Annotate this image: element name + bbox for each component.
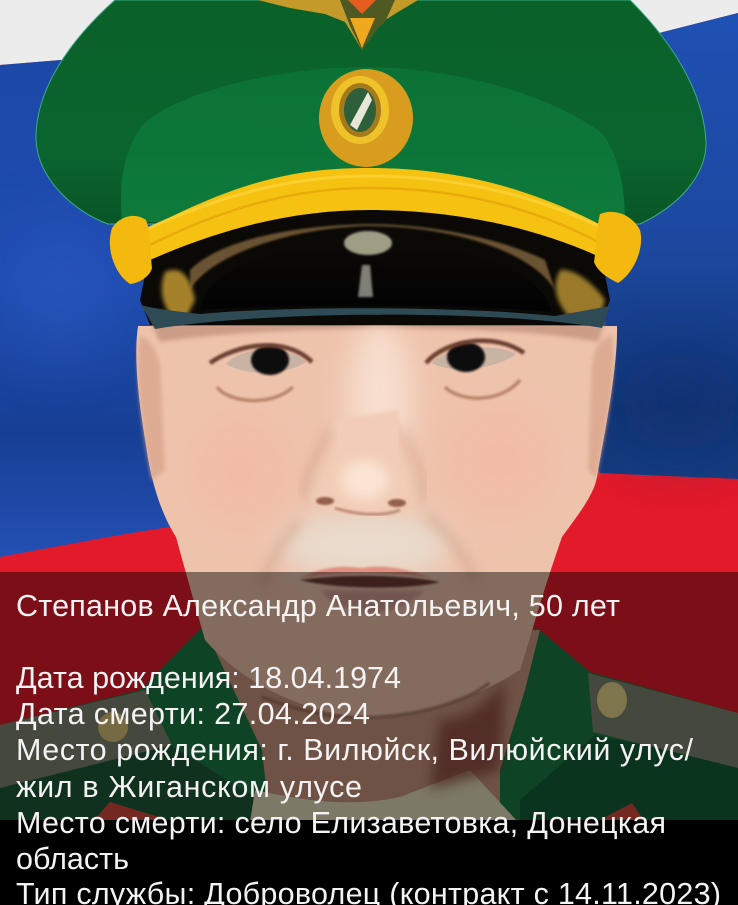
visor bottom edge	[141, 305, 610, 329]
gold cord	[110, 168, 641, 284]
uniform: shoulders and jacket	[0, 627, 738, 830]
visor centre highlight	[358, 265, 373, 297]
bottom black panel	[0, 820, 738, 905]
smile lines	[262, 515, 475, 585]
cap badge	[258, 0, 418, 50]
right shoulder board	[588, 673, 738, 768]
place of death continued: область	[16, 842, 129, 876]
left shoulder board	[0, 690, 172, 788]
caption overlay panel	[0, 572, 738, 820]
visor right gold trim	[556, 270, 605, 318]
right eye	[426, 341, 524, 398]
cap band	[121, 67, 625, 222]
place of death: Место смерти: село Елизаветовка, Донецкая	[16, 806, 666, 840]
left eye	[210, 345, 312, 401]
cheek warmth	[190, 415, 290, 525]
portrait: face	[136, 320, 617, 718]
left cord end	[110, 216, 152, 284]
nose	[306, 410, 421, 515]
visor left gold trim	[162, 270, 195, 316]
caption text	[16, 589, 721, 905]
right button	[597, 682, 627, 718]
left button	[98, 712, 128, 742]
visor	[200, 238, 552, 312]
place of birth: Место рождения: г. Вилюйск, Вилюйский улус/	[16, 733, 694, 767]
cap crown	[36, 0, 706, 224]
portrait: neck and shirt	[210, 630, 540, 822]
cap	[36, 0, 706, 329]
date of death: Дата смерти: 27.04.2024	[16, 697, 370, 731]
name and age: Степанов Александр Анатольевич, 50 лет	[16, 589, 620, 623]
light bridge of nose and lip area	[348, 320, 412, 480]
right cord end	[594, 212, 641, 283]
left collar tab	[94, 802, 162, 822]
mouth	[300, 567, 440, 612]
left ear shade	[138, 335, 165, 480]
right ear shade	[588, 335, 614, 478]
chin crease	[262, 683, 489, 718]
cockade	[319, 69, 413, 167]
visor interior arc	[190, 224, 555, 290]
forehead shadow	[150, 322, 605, 342]
date of birth: Дата рождения: 18.04.1974	[16, 661, 401, 695]
chin strap button	[344, 231, 392, 255]
right collar tab	[596, 803, 645, 822]
dark under band	[140, 209, 610, 325]
residence: жил в Жиганском улусе	[16, 770, 362, 804]
